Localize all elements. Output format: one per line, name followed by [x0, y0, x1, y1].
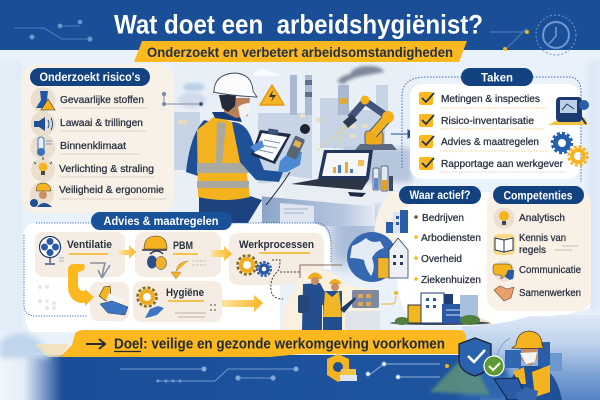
- list item: ziekenhuizen: Ziekenhuizen: [421, 274, 481, 286]
- card: hygiene: [133, 281, 222, 322]
- task: metingen: Metingen & inspecties: [441, 93, 540, 105]
- globe with tower: [347, 232, 408, 282]
- row: binnenklimaat: Binnenklimaat: [60, 140, 126, 152]
- task: advies: Advies & maatregelen: [441, 136, 539, 148]
- row: verlichting: Verlichting & straling: [59, 163, 154, 175]
- heading pill: Advies & maatregelen: [104, 216, 218, 228]
- goal banner: [35, 330, 466, 357]
- card: werkprocessen: [229, 233, 324, 285]
- row: veiligheid: [30, 182, 166, 207]
- arrow: dashed process path: [271, 260, 300, 299]
- card: hygiene: Hygiëne: [166, 287, 204, 299]
- goal banner: Doel: veilige en gezonde werkomgeving voorkomen: [114, 336, 445, 352]
- warning sign: [260, 85, 284, 105]
- card: ventilatie: [35, 232, 125, 277]
- list item: overheid: Overheid: [421, 253, 462, 265]
- icon: shield in bottom band: [327, 354, 357, 382]
- heading pill: [399, 186, 481, 204]
- row: kennis van regels: [493, 232, 578, 256]
- card: hands: [90, 282, 129, 321]
- icon: measuring device: [548, 97, 589, 125]
- icon: arrow: [86, 339, 105, 349]
- connector dots: [162, 92, 203, 106]
- task: metingen: [419, 92, 548, 108]
- worker with clipboard: [186, 73, 310, 226]
- arrow: ventilatie to hands: [68, 264, 94, 306]
- list item: arbodiensten: Arbodiensten: [421, 232, 481, 244]
- workers on site group: [282, 265, 398, 330]
- worker with tablet bottom right: [494, 331, 562, 400]
- heading pill: [91, 212, 232, 230]
- task: advies: [419, 135, 548, 151]
- card: PBM: [135, 232, 221, 277]
- title: Wat doet een arbeidshygiënist?: [114, 10, 483, 40]
- card: PBM: PBM: [173, 240, 193, 252]
- decorative dot grid: [38, 285, 56, 310]
- arrow: grey curved: [90, 263, 110, 278]
- heading pill: Taken: [481, 72, 513, 84]
- row: analytisch: Analytisch: [519, 212, 565, 224]
- arrow: PBM to werkprocessen: [211, 246, 232, 261]
- lab vials: [373, 166, 393, 191]
- panel: taken: [402, 68, 589, 182]
- row: lawaai: [30, 112, 146, 136]
- top header band: [0, 0, 600, 55]
- task: rapportage: Rapportage aan werkgever: [441, 158, 563, 170]
- row: kennis van regels: Kennis van: [519, 232, 566, 244]
- panel: advies en maatregelen: [24, 212, 331, 332]
- task: rapportage: [419, 157, 565, 172]
- task: risico: [419, 114, 545, 129]
- row: kennis van regels: regels: [519, 244, 546, 256]
- city illustration: [390, 293, 495, 325]
- arrow: ventilatie to PBM: [119, 245, 136, 259]
- factory background: [174, 66, 412, 183]
- row: samenwerken: Samenwerken: [519, 287, 581, 299]
- central scene: factory and worker: [174, 66, 415, 226]
- heading pill: Competenties: [504, 190, 572, 202]
- row: verlichting: [31, 157, 154, 182]
- building icon: [386, 210, 408, 233]
- arrow: PBM to hygiene: [171, 261, 188, 279]
- robot arm: [318, 96, 415, 160]
- row: communicatie: Communicatie: [519, 264, 581, 276]
- task: risico: Risico-inventarisatie: [441, 115, 534, 127]
- row: lawaai: Lawaai & trillingen: [60, 117, 143, 129]
- icon: blue shield with check: [459, 338, 510, 376]
- heading pill: [461, 68, 533, 86]
- heading pill: Waar actief?: [410, 190, 470, 202]
- panel: onderzoekt risico's: [21, 64, 203, 213]
- laptop: [291, 150, 373, 197]
- row: gevaarlijke stoffen: Gevaarlijke stoffen: [60, 94, 144, 106]
- card: ventilatie: Ventilatie: [67, 239, 112, 251]
- row: binnenklimaat: [30, 134, 139, 160]
- list item: bedrijven: Bedrijven: [422, 212, 464, 224]
- bottom blue band: [0, 333, 515, 400]
- arrow: hygiene to workers: [222, 295, 263, 312]
- panel: waar actief: [347, 186, 590, 326]
- heading pill: [30, 68, 150, 86]
- row: veiligheid: Veiligheid & ergonomie: [59, 184, 164, 196]
- desk: [253, 176, 400, 226]
- subtitle banner: Onderzoekt en verbetert arbeidsomstandigheden: [147, 44, 453, 60]
- card: werkprocessen: Werkprocessen: [239, 239, 314, 251]
- row: gevaarlijke stoffen: [30, 88, 148, 112]
- panel: competenties: [487, 186, 591, 311]
- heading pill: Onderzoekt risico's: [40, 72, 140, 84]
- icon: gears: [552, 133, 588, 166]
